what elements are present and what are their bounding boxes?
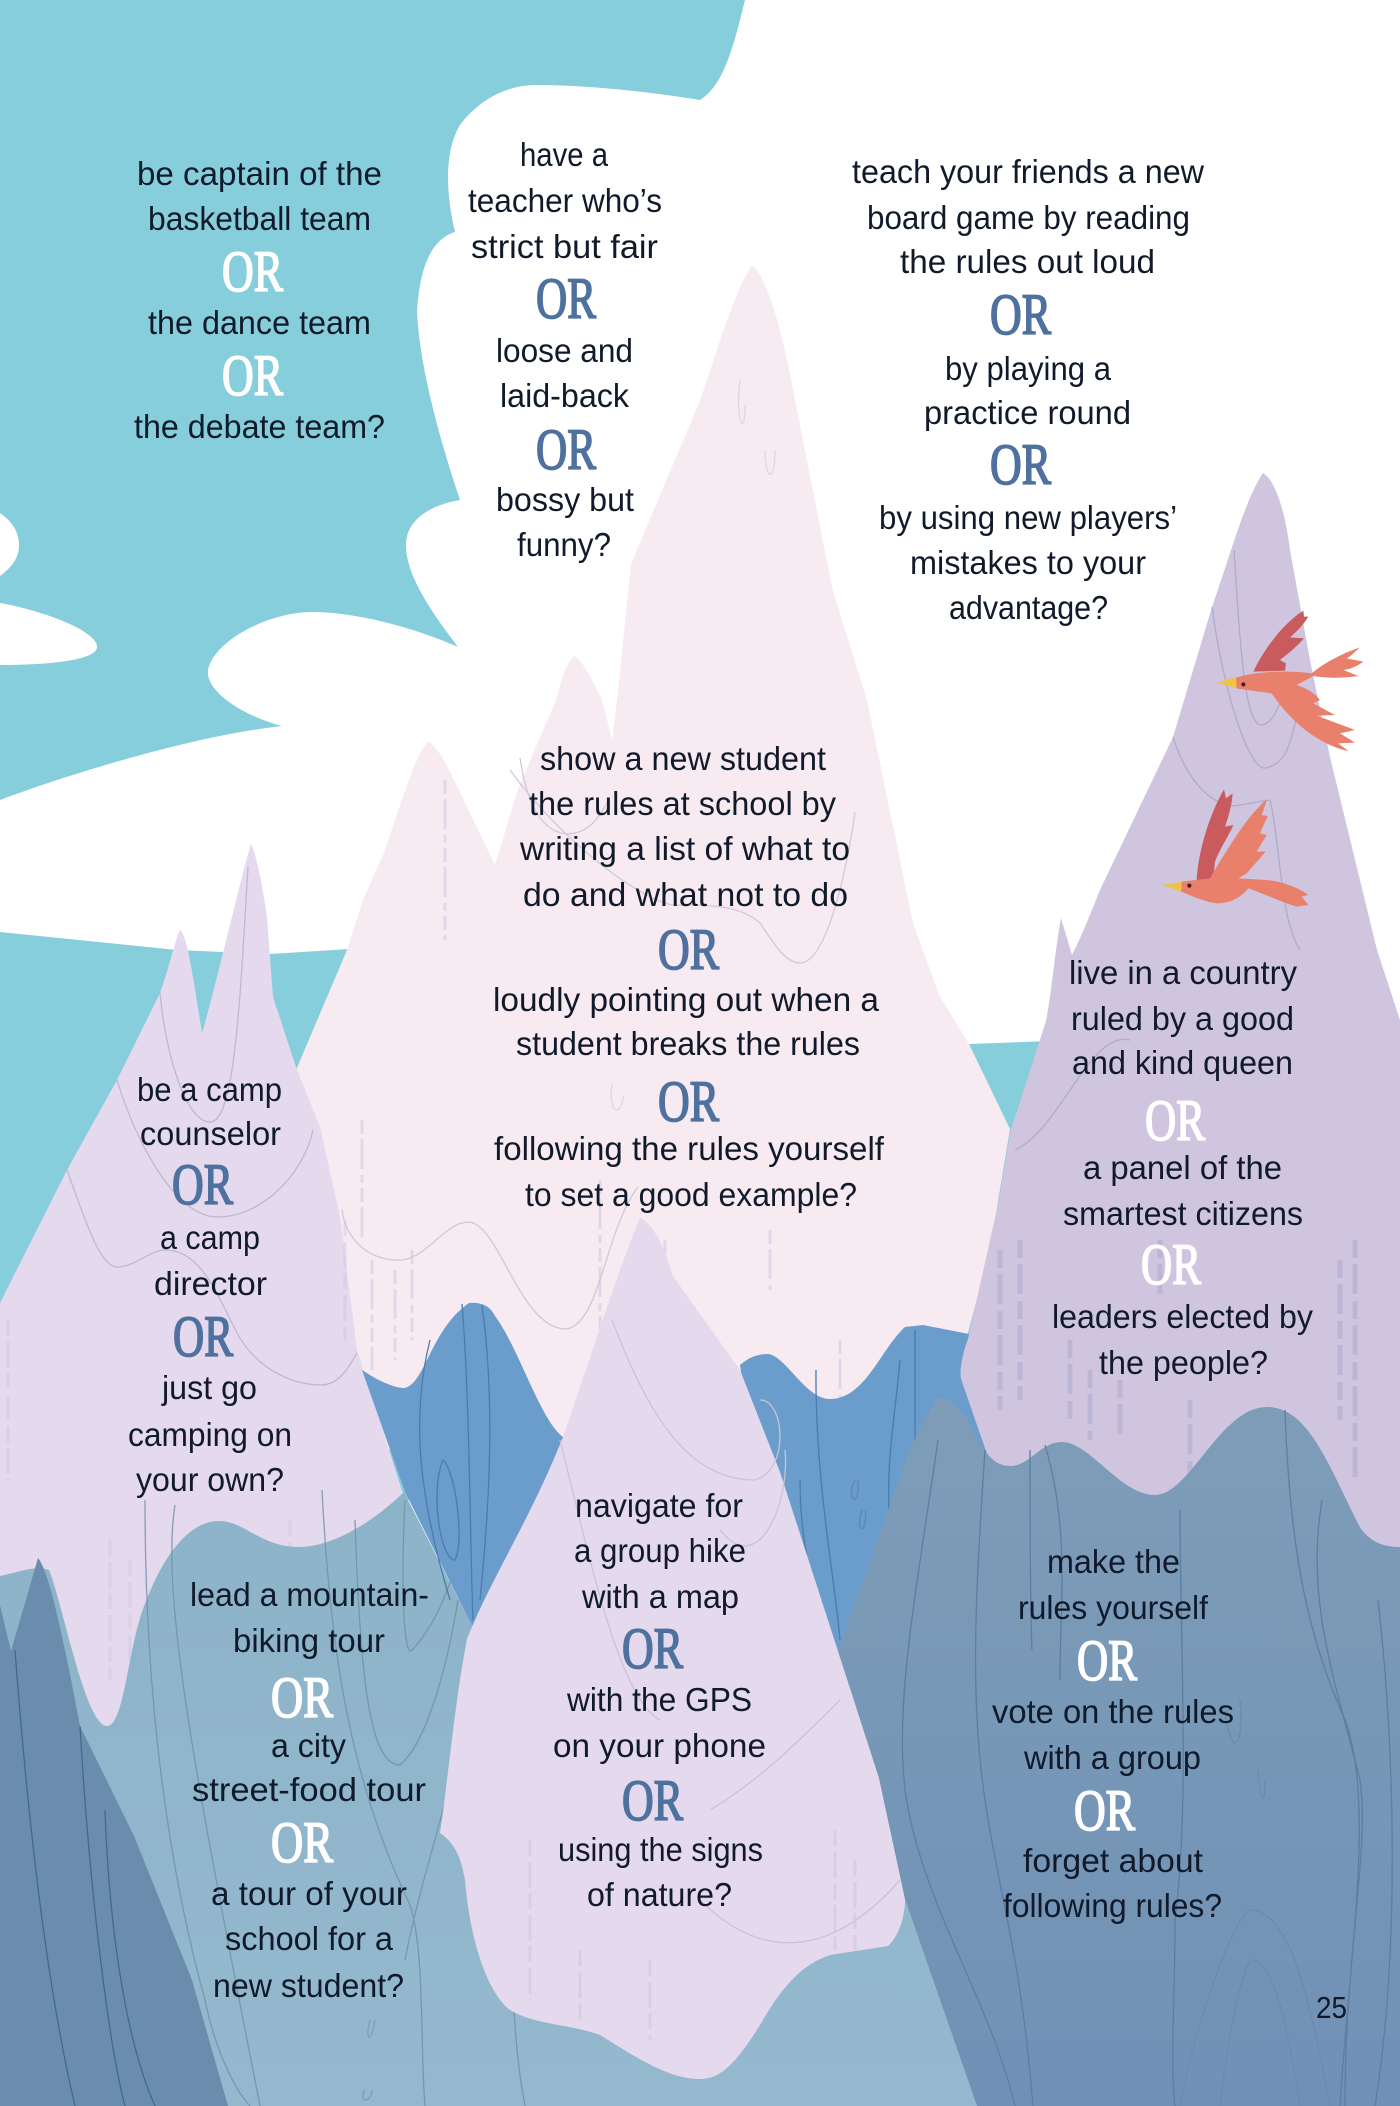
text block: teacher: laid-back <box>500 377 629 414</box>
mountain: dark blue left <box>0 1558 228 2106</box>
text block: country: leaders elected by <box>1052 1298 1313 1335</box>
text block: camp: a camp <box>160 1219 260 1256</box>
text block: teacher: OR <box>536 266 596 331</box>
text block: board game: OR <box>990 432 1051 497</box>
text block: camp: OR <box>172 1152 233 1217</box>
text block: captain: be captain of the <box>137 155 382 192</box>
text block: board game: practice round <box>924 394 1131 431</box>
text block: new student: do and what not to do <box>523 876 848 913</box>
text block: tour: OR <box>271 1665 333 1730</box>
text block: rules: vote on the rules <box>992 1693 1234 1730</box>
text block: country: OR <box>1145 1088 1205 1153</box>
text block: hike: of nature? <box>587 1876 732 1913</box>
text block: tour: lead a mountain- <box>190 1576 429 1613</box>
text block: teacher: strict but fair <box>471 228 658 265</box>
text block: country <box>1052 954 1313 1381</box>
text block: camp: just go <box>161 1369 257 1406</box>
text block: board game: mistakes to your <box>910 544 1146 581</box>
text block: country: and kind queen <box>1072 1044 1293 1081</box>
text block: captain: OR <box>222 343 283 408</box>
text block: hike: using the signs <box>558 1831 763 1868</box>
text block: hike: on your phone <box>553 1727 766 1764</box>
mountain: blue left piece <box>362 1303 600 1640</box>
text block: hike <box>553 1487 766 1913</box>
text block: new student <box>493 740 885 1213</box>
text block: hike: with the GPS <box>566 1681 752 1718</box>
text block: board game: advantage? <box>949 589 1108 626</box>
text block: board game <box>852 153 1204 626</box>
text block: new student: to set a good example? <box>525 1176 857 1213</box>
text block: new student: writing a list of what to <box>519 830 850 867</box>
text block: camp: camping on <box>128 1416 292 1453</box>
text block: hike: OR <box>622 1616 683 1681</box>
text block: tour: new student? <box>213 1967 404 2004</box>
text block: teacher: OR <box>536 417 596 482</box>
text block: camp <box>128 1071 292 1498</box>
text block: captain: the dance team <box>148 304 371 341</box>
text block: hike: navigate for <box>575 1487 743 1524</box>
text block: country: ruled by a good <box>1071 1000 1294 1037</box>
sky with cloud edge <box>0 0 745 800</box>
mountain: left lilac <box>0 844 405 1800</box>
text block: rules: following rules? <box>1003 1887 1222 1924</box>
text block: camp: be a camp <box>137 1071 282 1108</box>
text block: country: smartest citizens <box>1063 1195 1303 1232</box>
mountain: blue right piece <box>740 1325 1010 1730</box>
text block: new student: OR <box>658 917 719 982</box>
text block: rules: OR <box>1077 1628 1137 1693</box>
text block: camp: counselor <box>140 1115 281 1152</box>
text block: board game: board game by reading <box>867 199 1190 236</box>
text block: rules: make the <box>1047 1543 1180 1580</box>
text block: rules: OR <box>1074 1778 1135 1843</box>
mountain: centre lilac <box>440 1218 905 2079</box>
text block: rules: rules yourself <box>1018 1589 1209 1626</box>
text block: board game: the rules out loud <box>900 243 1155 280</box>
text block: country: OR <box>1141 1232 1201 1297</box>
text block: new student: loudly pointing out when a <box>493 981 880 1018</box>
text block: new student: OR <box>658 1069 719 1134</box>
text block: rules <box>992 1543 1234 1924</box>
text block: hike: OR <box>622 1768 683 1833</box>
text block: tour: a city <box>271 1727 346 1764</box>
page number: 25 <box>1316 1990 1347 2025</box>
text block: board game: teach your friends a new <box>852 153 1204 190</box>
text block: captain: OR <box>222 239 283 304</box>
bird: upper <box>1217 611 1363 751</box>
bird: lower <box>1162 789 1308 907</box>
text block: tour: a tour of your <box>211 1875 407 1912</box>
text block: rules: forget about <box>1023 1842 1203 1879</box>
text block: hike: with a map <box>581 1578 739 1615</box>
text block: teacher: funny? <box>517 526 611 563</box>
text block: new student: the rules at school by <box>529 785 836 822</box>
text block: board game: by playing a <box>945 350 1112 387</box>
lower sky <box>0 932 1100 1500</box>
text block: camp: director <box>154 1265 267 1302</box>
mountain: dark blue right <box>838 1397 1400 2106</box>
text block: tour: street-food tour <box>192 1771 426 1808</box>
text block: rules: with a group <box>1023 1739 1201 1776</box>
text block: country: a panel of the <box>1083 1149 1282 1186</box>
mountain: right lilac <box>961 473 1400 1600</box>
text block: camp: OR <box>173 1304 233 1369</box>
text block: captain <box>134 155 385 445</box>
text block: board game: OR <box>990 282 1051 347</box>
text block: tour: biking tour <box>233 1622 385 1659</box>
text block: hike: a group hike <box>574 1532 746 1569</box>
text block: country: the people? <box>1099 1344 1268 1381</box>
text block: new student: student breaks the rules <box>516 1025 860 1062</box>
text block: board game: by using new players’ <box>879 499 1177 536</box>
text block: new student: following the rules yourself <box>494 1130 885 1167</box>
text block: country: live in a country <box>1069 954 1297 991</box>
text block: tour: school for a <box>225 1920 394 1957</box>
text block: teacher: have a <box>520 136 609 173</box>
text block: captain: basketball team <box>148 200 371 237</box>
text block: tour: OR <box>271 1810 333 1875</box>
text block: teacher: teacher who’s <box>468 182 662 219</box>
text block: teacher: loose and <box>496 332 633 369</box>
mountain: pale pink centre <box>280 265 1010 1450</box>
text block: new student: show a new student <box>540 740 826 777</box>
text block: captain: the debate team? <box>134 408 385 445</box>
text block: tour <box>190 1576 429 2004</box>
mountain: teal grey <box>0 1490 1080 2106</box>
text block: teacher: bossy but <box>496 481 634 518</box>
text block: teacher <box>468 136 662 563</box>
text block: camp: your own? <box>136 1461 284 1498</box>
